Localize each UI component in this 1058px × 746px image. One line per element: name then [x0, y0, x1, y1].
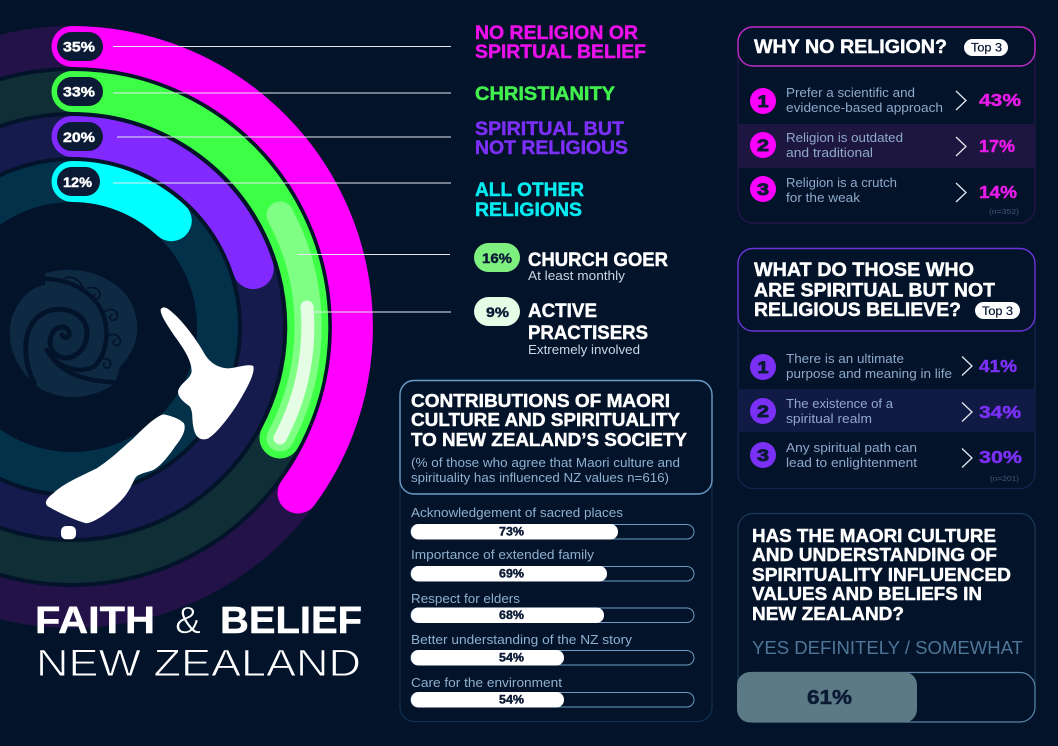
pill: 33%	[57, 77, 103, 106]
bar: NZ story 54%: 54%	[499, 652, 524, 664]
title: BELIEF	[220, 600, 362, 642]
bar: respect for elders 68%	[411, 592, 694, 623]
panel heading: HAS THE MAORI CULTURE	[752, 525, 996, 546]
item 2	[750, 131, 1015, 160]
callout: church goer	[474, 243, 668, 283]
item 1: 41%	[979, 356, 1017, 376]
pill: 20%: 20%	[63, 129, 96, 145]
item 2	[750, 397, 1022, 426]
panel heading: CULTURE AND SPIRITUALITY	[411, 409, 681, 430]
pill: 12%: 12%	[63, 174, 93, 190]
label: no religion: SPIRTUAL BELIEF	[475, 42, 646, 63]
label: spiritual but not religious: NOT RELIGIOUS	[475, 138, 628, 159]
item 3: for the weak	[786, 191, 861, 205]
item 2: 2	[757, 136, 769, 155]
panel: contributions of Maori culture	[400, 380, 712, 722]
arc: other religions 12%	[72, 182, 171, 221]
item 3: Religion is a crutch	[786, 176, 897, 190]
arc: spiritual 20%	[72, 136, 253, 269]
pill: 20%	[57, 122, 103, 151]
panel heading	[738, 27, 1035, 66]
panel heading: RELIGIOUS BELIEVE?	[754, 300, 961, 321]
title: NEW ZEALAND	[36, 643, 361, 685]
bar: 61%: 61%	[807, 687, 852, 709]
item 3: 3	[757, 446, 769, 465]
item 3: 14%	[979, 182, 1017, 202]
callout: active practisers: ACTIVE	[528, 301, 597, 322]
label: no religion	[475, 23, 646, 63]
row band	[738, 124, 1035, 168]
callout: church goer: CHURCH GOER	[528, 250, 668, 271]
label: no religion: NO RELIGION OR	[475, 23, 638, 44]
answer label: YES DEFINITELY / SOMEWHAT	[752, 637, 1023, 658]
bar: environment 54%	[411, 676, 694, 708]
bar: respect for elders 68%: Respect for elders	[411, 592, 520, 606]
panel: spiritual but not religious beliefs	[738, 248, 1035, 488]
icon: koru spiral	[10, 270, 137, 397]
item 3: 3	[757, 180, 769, 199]
pill: 12%	[57, 167, 100, 196]
label: all other religions: ALL OTHER	[475, 180, 584, 201]
arc: christianity 33%	[72, 91, 308, 438]
panel heading	[400, 380, 712, 494]
item 2: The existence of a	[786, 397, 893, 411]
bar: environment 54%: Care for the environment	[411, 676, 563, 690]
bar: respect for elders 68%: 68%	[499, 610, 524, 622]
row band	[738, 389, 1035, 432]
icon: New Zealand map	[46, 307, 254, 539]
item 2: 2	[757, 402, 769, 421]
panel: why no religion	[738, 27, 1035, 223]
arc: active practisers 9%	[280, 307, 308, 438]
item 1: evidence-based approach	[786, 101, 943, 115]
item 3: Any spiritual path can	[786, 441, 917, 455]
label: christianity: CHRISTIANITY	[475, 84, 615, 105]
title	[35, 600, 362, 685]
pill: 35%: 35%	[63, 38, 96, 54]
item 2: Religion is outdated	[786, 131, 903, 145]
panel heading: WHY NO RELIGION?	[754, 37, 947, 58]
bar: extended family 69%: Importance of extended family	[411, 548, 595, 562]
bar: extended family 69%	[411, 548, 694, 582]
bar: 61%	[737, 672, 1035, 722]
pill: 33%: 33%	[63, 84, 96, 100]
label: all other religions: RELIGIONS	[475, 200, 582, 221]
bar: environment 54%: 54%	[499, 694, 524, 706]
sample size: (n=352)	[989, 209, 1019, 216]
leader lines	[113, 46, 451, 312]
panel heading: Top 3	[971, 40, 1002, 54]
callout: church goer: 16%	[482, 250, 513, 266]
item 1: 1	[758, 358, 768, 377]
item 3	[750, 441, 1023, 470]
bar: sacred places 73%: 73%	[499, 526, 524, 538]
item 2: and traditional	[786, 146, 873, 160]
panel heading: WHAT DO THOSE WHO	[754, 260, 974, 281]
item 1	[750, 86, 1022, 115]
item 1: 1	[758, 92, 768, 111]
item 3: lead to enlightenment	[786, 456, 918, 470]
item 2: 34%	[979, 402, 1022, 422]
panel: influence of Maori culture	[737, 514, 1035, 722]
label: all other religions	[475, 180, 584, 221]
legend labels	[475, 23, 646, 221]
panel heading: Top 3	[982, 304, 1013, 318]
pill: 35%	[57, 32, 103, 61]
panel heading	[738, 248, 1035, 331]
bar: sacred places 73%	[411, 506, 694, 540]
title: FAITH	[35, 600, 155, 642]
panel heading: spirituality has influenced NZ values n=616)	[411, 471, 669, 485]
percentage pills on arcs	[57, 32, 103, 196]
arc: no religion 35%	[72, 46, 352, 493]
item 2: spiritual realm	[786, 412, 872, 426]
item 1: There is an ultimate	[786, 352, 904, 366]
item 1: 43%	[979, 90, 1022, 110]
callout: church goer: At least monthly	[528, 269, 626, 283]
panel heading: CONTRIBUTIONS OF MAORI	[411, 390, 670, 411]
background rings	[0, 46, 352, 608]
panel heading: SPIRITUALITY INFLUENCED	[752, 564, 1011, 585]
item 3	[750, 176, 1017, 205]
panel heading	[752, 525, 1011, 624]
sample size: (n=201)	[990, 476, 1019, 483]
chart: religion radial arcs	[72, 46, 352, 493]
item 2: 17%	[979, 136, 1015, 156]
label: spiritual but not religious: SPIRITUAL BUT	[475, 119, 624, 140]
bar: NZ story 54%: Better understanding of the NZ story	[411, 633, 633, 647]
panel heading: VALUES AND BELIEFS IN	[752, 583, 982, 604]
callout: active practisers: 9%	[486, 304, 510, 320]
callout: active practisers	[474, 297, 648, 357]
item 3: 30%	[979, 447, 1023, 467]
label: spiritual but not religious	[475, 119, 628, 159]
panel heading: TO NEW ZEALAND’S SOCIETY	[411, 429, 688, 450]
arc: church goer 16%	[280, 215, 308, 438]
panel heading: AND UNDERSTANDING OF	[752, 544, 997, 565]
panel heading: ARE SPIRITUAL BUT NOT	[754, 280, 995, 302]
bar: extended family 69%: 69%	[499, 568, 524, 580]
title: &	[175, 600, 201, 642]
callout: active practisers: PRACTISERS	[528, 323, 648, 344]
bar: NZ story 54%	[411, 633, 694, 666]
callout: active practisers: Extremely involved	[528, 343, 640, 357]
item 1	[750, 352, 1017, 381]
panel heading: NEW ZEALAND?	[752, 603, 904, 624]
item 1: purpose and meaning in life	[786, 367, 952, 381]
item 1: Prefer a scientific and	[786, 86, 915, 100]
bar: sacred places 73%: Acknowledgement of sacred places	[411, 506, 623, 520]
panel heading: (% of those who agree that Maori culture and	[411, 456, 680, 470]
